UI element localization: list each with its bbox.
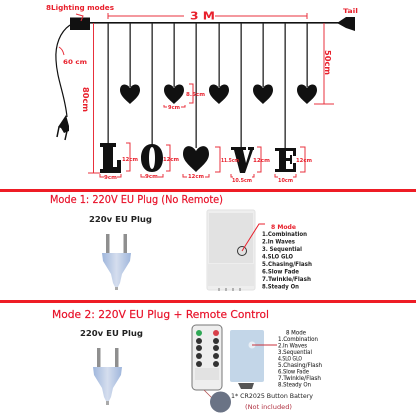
letter L	[100, 143, 121, 173]
panel: mode 2	[52, 308, 322, 412]
list: modes: 7.Twinkle/Flash	[278, 376, 321, 382]
size labels: 9cm	[104, 175, 117, 181]
controller box: blue	[230, 330, 264, 389]
size labels: 12cm	[188, 174, 204, 180]
list: modes: 6.Slow Fade	[278, 370, 309, 376]
size labels: 12cm	[253, 158, 270, 164]
size labels	[104, 92, 312, 184]
tail connector	[337, 17, 355, 31]
label: Tail: Tail	[343, 7, 358, 15]
size labels: 10.5cm	[232, 178, 252, 184]
pointer: 2.In Waves	[252, 344, 277, 346]
letter E	[275, 148, 296, 172]
label: 60 cm: 60 cm	[63, 58, 87, 66]
list: modes: 5.Chasing/Flash	[278, 363, 322, 369]
label: 8Lighting modes: 8Lighting modes	[46, 4, 114, 12]
size labels: 9cm	[168, 105, 180, 111]
size labels: 11.5cm	[221, 158, 239, 164]
letter V	[231, 147, 254, 173]
list: modes: 8 Mode	[271, 223, 297, 231]
label: 50cm: 50cm	[323, 50, 332, 75]
button ring	[238, 246, 246, 256]
size labels: 8.5cm	[186, 92, 205, 98]
label: 220v EU Plug: 220v EU Plug	[89, 215, 152, 224]
panel: mode 1	[50, 194, 312, 291]
list: modes: 3. Sequential	[262, 247, 302, 253]
list: modes: 1.Combination	[278, 337, 318, 343]
controller box	[70, 18, 90, 30]
power cord	[56, 25, 70, 117]
label: 220v EU Plug: 220v EU Plug	[80, 329, 143, 338]
list: modes: 8.Steady On	[278, 382, 311, 388]
heading: mode 2: Mode 2: 220V EU Plug + Remote Control	[52, 308, 269, 321]
size labels: 9cm	[145, 174, 158, 180]
list: modes: 5.Chasing/Flash	[262, 262, 312, 268]
list: modes: 7.Twinkle/Flash	[262, 277, 311, 283]
pointer: 8 Mode	[242, 224, 265, 251]
label: 3 M: 3 M	[190, 10, 215, 22]
hanging strands	[108, 23, 308, 148]
divider top	[0, 189, 416, 192]
red measurement lines	[59, 13, 334, 177]
list: modes: 2.In Waves	[262, 240, 295, 246]
label: battery: 1* CR2025 Button Battery	[231, 392, 313, 400]
letter O	[141, 144, 163, 172]
list: modes: 8.Steady On	[262, 284, 299, 290]
list: modes: 2.In Waves	[278, 344, 307, 350]
size labels: 12cm	[122, 157, 138, 163]
list: modes: 3.Sequential	[278, 350, 312, 356]
list: modes: 6.Slow Fade	[262, 270, 299, 276]
divider bottom	[0, 300, 416, 303]
list: modes: 8 Mode	[286, 330, 306, 336]
main wire	[90, 22, 340, 24]
size labels: 10cm	[278, 178, 293, 184]
list: modes	[278, 330, 322, 388]
diagram: light string dimensions	[46, 4, 358, 184]
button battery	[210, 392, 231, 412]
icon: EU plug	[102, 234, 131, 290]
size labels: 12cm	[163, 157, 179, 163]
list: modes	[262, 223, 312, 290]
icon: EU plug	[93, 348, 122, 405]
battery pointer	[204, 390, 212, 398]
controller box: white	[207, 210, 255, 291]
list: modes: 4.SLO GLO	[278, 356, 302, 362]
list: modes: 1.Combination	[262, 232, 307, 238]
remote control	[192, 325, 222, 390]
hearts	[120, 84, 317, 172]
label: not included: (Not included)	[245, 403, 292, 411]
black plug icon	[57, 115, 69, 140]
label: 80cm: 80cm	[81, 87, 90, 112]
heading: mode 1: Mode 1: 220V EU Plug (No Remote)	[50, 194, 223, 206]
list: modes: 4.SLO GLO	[262, 254, 293, 260]
size labels: 12cm	[296, 158, 312, 164]
